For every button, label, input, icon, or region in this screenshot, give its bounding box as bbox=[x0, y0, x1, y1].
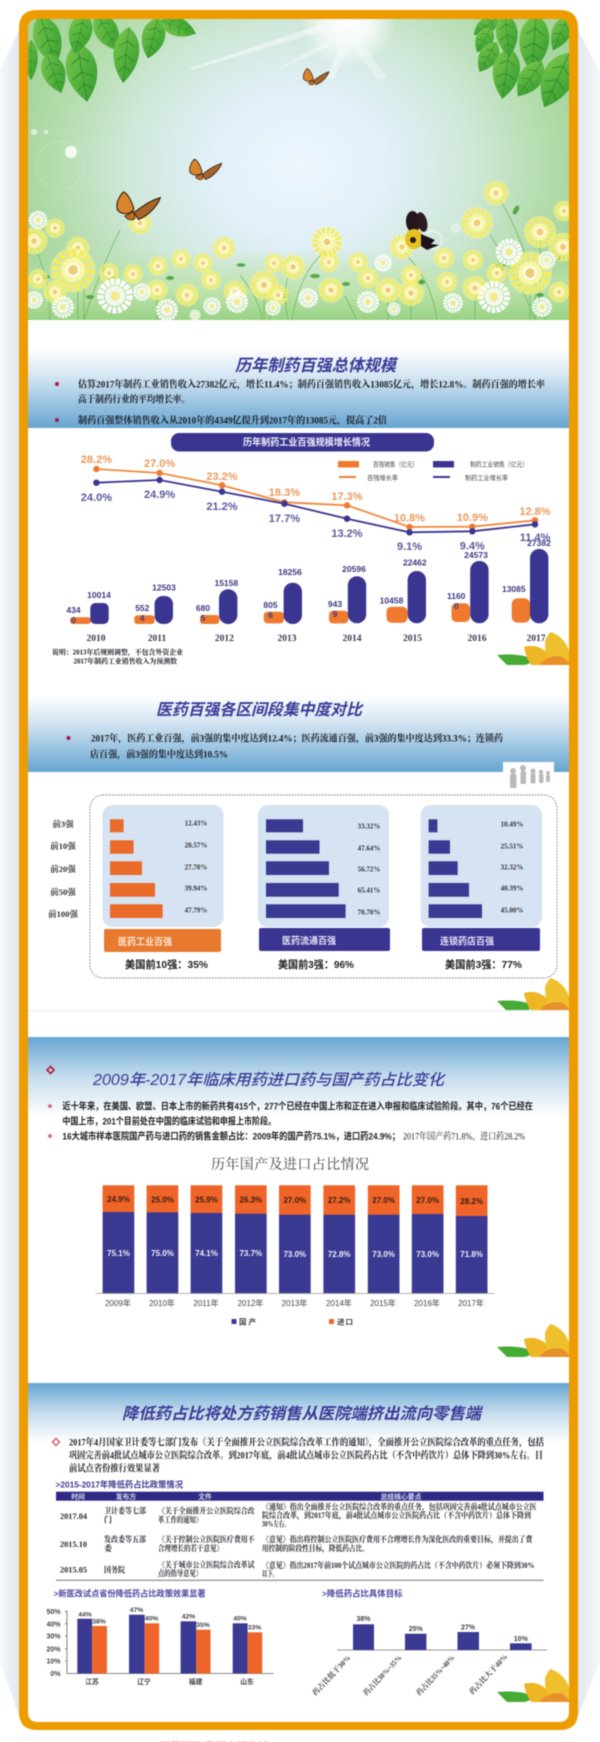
policy table: 发改委等五部 bbox=[104, 1534, 146, 1544]
province bar chart: 44% bbox=[78, 1612, 92, 1618]
panel: chain pharmacies: 25.51% bbox=[501, 842, 523, 850]
chart legend: 国产 bbox=[239, 1316, 256, 1326]
panel: chain pharmacies: 10.49% bbox=[501, 820, 523, 828]
line chart growth rates: 24.0% bbox=[81, 492, 112, 504]
stacked bar chart: 26.3% bbox=[239, 1196, 262, 1205]
province bar chart: 40% bbox=[145, 1616, 158, 1622]
line chart growth rates: 23.2% bbox=[206, 471, 238, 483]
green leaves top left bbox=[27, 18, 196, 102]
stacked bar chart: 71.8% bbox=[460, 1250, 483, 1259]
province bar chart: 山东 bbox=[240, 1677, 254, 1686]
stacked bar chart: 73.0% bbox=[283, 1250, 306, 1259]
policy table: 总结核心要点 bbox=[381, 1492, 422, 1501]
chart legend: 百强增长率 bbox=[367, 473, 398, 482]
policy table: 革工作的通知》 bbox=[158, 1514, 202, 1524]
province bar chart: 50% bbox=[46, 1609, 61, 1616]
stacked bar chart: 2011年 bbox=[193, 1298, 219, 1308]
stacked bar chart: 74.1% bbox=[195, 1249, 218, 1258]
target bar chart: 药占比30%~35% bbox=[361, 1653, 403, 1697]
province bar chart: 35% bbox=[196, 1622, 210, 1629]
bar chart sales: 6 bbox=[268, 610, 273, 620]
chart legend: 进口 bbox=[337, 1316, 353, 1326]
bullet text: 制药百强整体销售收入从2010年的4349亿提升到2017年的13085元，提高了2倍 bbox=[78, 414, 387, 426]
policy table: 卫计委等七部 bbox=[104, 1506, 146, 1516]
panel: chain pharmacies: 连锁药店百强 bbox=[440, 936, 494, 948]
chart legend bbox=[338, 460, 528, 482]
bar chart sales: 22462 bbox=[403, 558, 427, 568]
bullet text bbox=[48, 1100, 533, 1142]
corner flower bbox=[497, 632, 569, 665]
bar chart sales: 13085 bbox=[502, 584, 526, 594]
stacked bar chart: 24.9% bbox=[107, 1195, 130, 1204]
bar chart sales bbox=[66, 538, 551, 644]
target bar chart: 药占比低于30% bbox=[310, 1653, 352, 1697]
chart title: 历年国产及进口占比情况 bbox=[211, 1156, 369, 1173]
panel: pharma industry: 27.70% bbox=[185, 864, 207, 872]
line chart growth rates: 27.0% bbox=[144, 458, 175, 470]
left chart heading: >新医改试点省份降低药占比政策效果显著 bbox=[54, 1588, 206, 1598]
policy table: 《关于城市公立医院综合改革试 bbox=[158, 1559, 254, 1569]
province bar chart: 福建 bbox=[189, 1677, 203, 1686]
stacked bar chart: 27.0% bbox=[372, 1196, 395, 1205]
policy table: 《通知》指出全面推开公立医院综合改革的重点任务，包括巩固完善前4批试点城市公立医 bbox=[262, 1502, 536, 1512]
line chart growth rates: 12.8% bbox=[519, 506, 551, 518]
bar chart sales: 0 bbox=[454, 601, 459, 611]
US comparison labels bbox=[125, 958, 523, 971]
stacked bar chart: 27.0% bbox=[416, 1196, 439, 1205]
stacked bar chart: 27.2% bbox=[328, 1196, 351, 1205]
line chart growth rates: 24.9% bbox=[144, 489, 175, 501]
policy table: 用控制的阶段性目标，降低药占比。 bbox=[262, 1543, 369, 1554]
policy table: 院综合改革，到2017年底，前4批试点城市公立医院药占比（不含中药饮片）总体下降到 bbox=[262, 1510, 531, 1521]
stacked bar chart: 2009年 bbox=[105, 1298, 131, 1308]
stacked bar chart: 75.0% bbox=[151, 1249, 174, 1258]
heading: 降低药占比将处方药销售从医院端挤出流向零售端 bbox=[122, 1405, 484, 1423]
panel: chain pharmacies: 40.39% bbox=[501, 884, 523, 892]
chart legend: 制药工业增长率 bbox=[465, 473, 508, 482]
stacked bar chart: 75.1% bbox=[107, 1249, 130, 1258]
target bar chart: 药占比35%~40% bbox=[414, 1653, 456, 1697]
stacked bar chart: 25.9% bbox=[195, 1195, 218, 1204]
row labels: 前100强 bbox=[48, 909, 79, 919]
header band bbox=[28, 695, 569, 772]
bar chart sales: 2011 bbox=[148, 634, 166, 644]
yellow daisies bbox=[20, 180, 578, 307]
heading: 医药百强各区间段集中度对比 bbox=[156, 701, 364, 719]
bar chart sales: 0 bbox=[71, 615, 76, 625]
province bar chart: 20% bbox=[46, 1646, 61, 1653]
chart note: 说明：2013年后规则调整，不包含外资企业 bbox=[52, 648, 183, 658]
bullet text bbox=[55, 378, 545, 426]
line chart growth rates: 17.7% bbox=[269, 513, 300, 525]
stacked bar chart: 25.0% bbox=[151, 1195, 174, 1204]
target bar chart: 10% bbox=[514, 1636, 529, 1643]
bullet text: 高于制药行业的平均增长率。 bbox=[78, 394, 190, 406]
chart note: 2017年制药工业销售收入为预测数 bbox=[74, 656, 177, 666]
bar chart sales: 24573 bbox=[464, 550, 488, 560]
panel: pharma industry: 20.57% bbox=[185, 842, 207, 850]
bar chart sales: 1160 bbox=[447, 591, 466, 601]
bullet text bbox=[52, 1436, 544, 1474]
panel: drug share reduction bbox=[28, 1383, 569, 1702]
line chart growth rates: 13.2% bbox=[331, 528, 363, 540]
panel: import vs domestic bbox=[28, 1037, 569, 1357]
province bar chart: 47% bbox=[130, 1607, 143, 1614]
stacked bar chart: 72.8% bbox=[328, 1250, 351, 1259]
province bar chart: 10% bbox=[46, 1659, 61, 1666]
panel: concentration comparison bbox=[28, 695, 569, 1011]
bullet text: 16大城市样本医院国产药与进口药的销售金额占比：2009年的国产药75.1%，进口药24.9%； bbox=[62, 1130, 400, 1142]
stacked bar chart: 27.0% bbox=[283, 1196, 306, 1205]
chart title pill: 历年制药工业百强规模增长情况 bbox=[243, 436, 370, 448]
stacked bar chart: 2014年 bbox=[326, 1298, 352, 1308]
panel: pharma distribution: 65.41% bbox=[358, 886, 380, 894]
bar chart sales: 10014 bbox=[87, 590, 111, 600]
US comparison labels: 美国前10强：35% bbox=[125, 958, 209, 971]
line chart growth rates: 21.2% bbox=[206, 501, 238, 513]
butterfly large bbox=[117, 192, 160, 220]
bar chart sales: 2013 bbox=[278, 634, 297, 644]
province bar chart: 0% bbox=[50, 1671, 61, 1678]
bar chart sales: 15158 bbox=[214, 578, 238, 588]
heading: 历年制药百强总体规模 bbox=[235, 356, 398, 375]
policy table: 2015.05 bbox=[60, 1566, 87, 1575]
policy table: 《关于全面推开公立医院综合改 bbox=[158, 1506, 254, 1516]
bar chart sales: 2015 bbox=[403, 634, 422, 644]
bullet text: 2017年国产药71.8%、进口药28.2% bbox=[403, 1130, 525, 1142]
target bar chart: 27% bbox=[461, 1624, 476, 1632]
policy table: 2015.10 bbox=[60, 1540, 87, 1549]
icon: people group bbox=[503, 762, 554, 790]
chart note bbox=[52, 648, 183, 666]
province bar chart: 江苏 bbox=[85, 1677, 99, 1686]
small grass leaves bbox=[40, 204, 564, 299]
bar chart sales: 12503 bbox=[152, 582, 176, 592]
bar chart sales: 943 bbox=[328, 599, 342, 609]
policy table: 发布方 bbox=[116, 1492, 136, 1501]
US comparison labels: 美国前3强：96% bbox=[278, 958, 355, 971]
chart legend: 百强销售（亿元） bbox=[373, 460, 418, 468]
bar chart sales: 434 bbox=[66, 605, 81, 615]
bullet text: 中国上市，201个目前处在中国的临床试验和申报上市阶段。 bbox=[62, 1116, 276, 1128]
panel: pharma distribution: 医药流通百强 bbox=[282, 935, 336, 947]
bullet text: 2017年4月国家卫计委等七部门发布《关于全面推开公立医院综合改革工作的通知》，全面推开公立医院综合改革的重点任务，包括 bbox=[69, 1436, 544, 1448]
bar chart sales: 2012 bbox=[215, 634, 234, 644]
policy table: 2017.04 bbox=[60, 1512, 87, 1521]
policy table: 文件 bbox=[198, 1492, 212, 1501]
line chart growth rates: 28.2% bbox=[81, 454, 112, 466]
target bar chart: 药占比大于40% bbox=[467, 1652, 509, 1696]
corner flower bbox=[497, 978, 569, 1011]
bullet text: 前试点省份推行效果显著 bbox=[69, 1462, 160, 1474]
header band bbox=[28, 1383, 569, 1443]
stacked bar chart: 73.0% bbox=[372, 1250, 395, 1259]
policy table: 合理增长的若干意见》 bbox=[158, 1543, 223, 1553]
panel: chain pharmacies bbox=[421, 805, 542, 951]
line chart growth rates: 9.4% bbox=[460, 540, 485, 552]
header band bbox=[28, 348, 569, 428]
bullet text: 2017年，医药工业百强，前3强的集中度达到12.4%；医药流通百强，前3强的集中度达到33.3%；连锁药 bbox=[91, 732, 503, 744]
butterfly black and yellow bbox=[405, 210, 439, 250]
line chart growth rates bbox=[81, 454, 551, 553]
panel: pharma distribution: 56.72% bbox=[358, 866, 380, 874]
sun glow and rays bbox=[190, 18, 391, 80]
panel: pharma distribution: 47.64% bbox=[358, 844, 380, 852]
stacked bar chart: 2015年 bbox=[370, 1298, 396, 1308]
province bar chart: 40% bbox=[46, 1621, 61, 1628]
row labels: 前20强 bbox=[50, 864, 77, 874]
line chart growth rates: 10.8% bbox=[394, 512, 425, 524]
policy table: 《意见》指出将控制公立医院医疗费用不合理增长作为深化医改的重要目标，并提出了费 bbox=[262, 1534, 533, 1545]
bullet text: 近十年来，在美国、欧盟、日本上市的新药共有415个，277个已经在中国上市和正在进入申报和临床试验阶段。其中，76个已经在 bbox=[62, 1100, 533, 1112]
flower stems bbox=[36, 200, 545, 320]
panel: pharma distribution bbox=[258, 805, 390, 951]
heading: 2009年-2017年临床用药进口药与国产药占比变化 bbox=[92, 1071, 447, 1089]
target bar chart: 38% bbox=[356, 1616, 371, 1623]
header band bbox=[28, 1037, 569, 1117]
line chart growth rates: 9.1% bbox=[397, 541, 422, 553]
policy table: 《意见》指出2017年前100个试点城市公立医院的药占比（不含中药饮片）必须下降到30% bbox=[262, 1560, 534, 1570]
row labels: 前3强 bbox=[52, 819, 75, 829]
panel: pharma industry: 39.94% bbox=[185, 884, 207, 892]
stacked bar chart: 2016年 bbox=[414, 1298, 440, 1308]
row labels: 前10强 bbox=[50, 841, 77, 851]
corner flower bbox=[497, 1669, 569, 1702]
panel: pharma distribution: 70.70% bbox=[358, 908, 380, 916]
policy table: 门 bbox=[104, 1514, 112, 1524]
bar chart sales: 552 bbox=[135, 603, 150, 613]
line chart growth rates: 17.3% bbox=[331, 491, 363, 503]
butterfly small bbox=[303, 68, 329, 85]
policy table: 点的指导意见》 bbox=[158, 1568, 202, 1578]
policy table: 《关于控制公立医院医疗费用不 bbox=[158, 1534, 255, 1544]
chart legend: 制药工业销售（亿元） bbox=[470, 460, 528, 468]
butterfly medium bbox=[190, 159, 222, 180]
bullet text: 店百强，前3强的集中度达到10.5% bbox=[90, 748, 228, 760]
bullet text bbox=[66, 732, 503, 760]
bar chart sales: 5 bbox=[201, 613, 206, 623]
province bar chart: 42% bbox=[182, 1614, 195, 1620]
policy table bbox=[56, 1492, 544, 1581]
white daisies bbox=[27, 212, 554, 320]
dashed frame bbox=[90, 795, 557, 978]
province bar chart bbox=[46, 1607, 274, 1686]
panel: pharma distribution: 33.32% bbox=[358, 822, 380, 830]
bar chart sales: 2016 bbox=[468, 634, 487, 644]
panel: pharma industry: 12.43% bbox=[185, 820, 207, 828]
right chart heading: >降低药占比具体目标 bbox=[322, 1588, 403, 1598]
line chart growth rates: 11.4% bbox=[520, 532, 551, 544]
stacked bar chart: 73.0% bbox=[416, 1250, 439, 1259]
bar chart sales: 2014 bbox=[342, 634, 362, 644]
green leaves top right bbox=[473, 18, 570, 108]
bar chart sales: 2017 bbox=[526, 634, 546, 644]
province bar chart: 33% bbox=[248, 1624, 261, 1632]
diamond bullet bbox=[47, 1066, 54, 1074]
province bar chart: 40% bbox=[233, 1616, 247, 1622]
line chart growth rates: 10.9% bbox=[457, 512, 488, 524]
province bar chart: 辽宁 bbox=[137, 1677, 151, 1686]
bar chart sales: 20596 bbox=[342, 564, 366, 574]
panel: pharma industry: 47.79% bbox=[185, 906, 207, 914]
bar chart sales: 805 bbox=[263, 600, 278, 610]
bullet text: 估算2017年制药工业销售收入27382亿元，增长11.4%；制药百强销售收入13085亿元，增长12.8%。制药百强的增长率 bbox=[78, 378, 545, 390]
policy table: 时间 bbox=[71, 1492, 85, 1501]
target bar chart bbox=[310, 1616, 547, 1697]
bar chart sales: 4 bbox=[140, 613, 145, 623]
province bar chart: 38% bbox=[92, 1618, 106, 1626]
bar chart sales: 2010 bbox=[86, 634, 106, 644]
row labels bbox=[48, 819, 79, 919]
panel: pharma industry: 医药工业百强 bbox=[118, 936, 172, 948]
row labels: 前50强 bbox=[50, 887, 77, 897]
panel: chain pharmacies: 45.00% bbox=[501, 906, 523, 914]
stacked bar chart: 2013年 bbox=[282, 1298, 307, 1308]
bar chart sales: 18256 bbox=[278, 567, 302, 577]
policy table: 委 bbox=[104, 1543, 113, 1553]
chart title pill bbox=[171, 433, 434, 452]
stacked bar chart bbox=[96, 1185, 494, 1308]
bar chart sales: 10458 bbox=[380, 596, 404, 606]
panel: pharma industry bbox=[102, 805, 224, 952]
corner flower bbox=[497, 1324, 569, 1357]
hero illustration: meadow with butterflies bbox=[20, 0, 584, 320]
policy table heading: >2015-2017年降低药占比政策情况 bbox=[56, 1480, 183, 1490]
policy table: 以下。 bbox=[262, 1568, 278, 1578]
bar chart sales: 680 bbox=[196, 603, 210, 613]
US comparison labels: 美国前3强：77% bbox=[445, 958, 523, 971]
stacked bar chart: 73.7% bbox=[239, 1249, 262, 1258]
policy table: 30%左右。 bbox=[262, 1518, 290, 1528]
bar chart sales: 27382 bbox=[527, 538, 551, 548]
province bar chart: 30% bbox=[46, 1634, 61, 1641]
stacked bar chart: 28.2% bbox=[460, 1197, 483, 1206]
stacked bar chart: 2010年 bbox=[149, 1298, 175, 1308]
bar chart sales: 9 bbox=[333, 609, 338, 619]
line chart growth rates: 18.3% bbox=[269, 487, 300, 499]
panel: chain pharmacies: 32.32% bbox=[501, 864, 523, 872]
stacked bar chart: 2017年 bbox=[458, 1298, 484, 1308]
policy table: 国务院 bbox=[104, 1565, 125, 1575]
panel: overall scale bbox=[28, 348, 569, 666]
chart legend bbox=[232, 1316, 353, 1326]
stacked bar chart: 2012年 bbox=[238, 1298, 263, 1308]
target bar chart: 25% bbox=[409, 1626, 423, 1633]
